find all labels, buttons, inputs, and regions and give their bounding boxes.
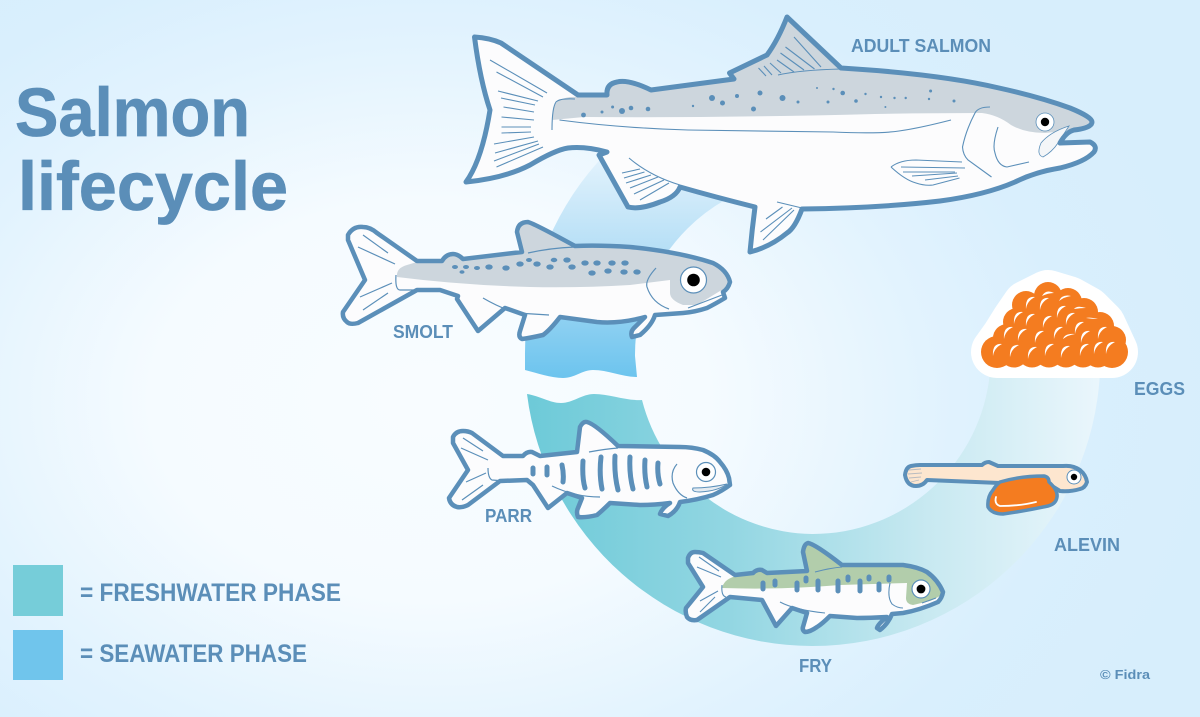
label: adult salmon: ADULT SALMON [851, 36, 991, 56]
label: alevin: ALEVIN [1054, 535, 1120, 555]
fish: fry [686, 543, 943, 632]
fish: parr [449, 422, 730, 517]
title: lifecycle [18, 148, 288, 225]
legend: seawater phase [13, 630, 307, 680]
title: Salmon [15, 74, 250, 151]
credit: © Fidra [1100, 667, 1151, 682]
label: eggs: EGGS [1134, 379, 1185, 399]
fish: alevin with yolk sac [905, 462, 1087, 514]
seawater arc [525, 140, 725, 378]
legend: seawater phase: = SEAWATER PHASE [80, 640, 307, 668]
eggs cluster [981, 282, 1128, 368]
legend: freshwater phase: = FRESHWATER PHASE [80, 579, 341, 607]
label: parr: PARR [485, 506, 532, 526]
legend: freshwater phase [13, 565, 341, 616]
title [15, 74, 288, 225]
freshwater arc [527, 372, 1100, 646]
fish: adult salmon [466, 17, 1095, 252]
fish: smolt [343, 222, 730, 339]
label: fry: FRY [799, 656, 832, 676]
label: smolt: SMOLT [393, 322, 453, 342]
